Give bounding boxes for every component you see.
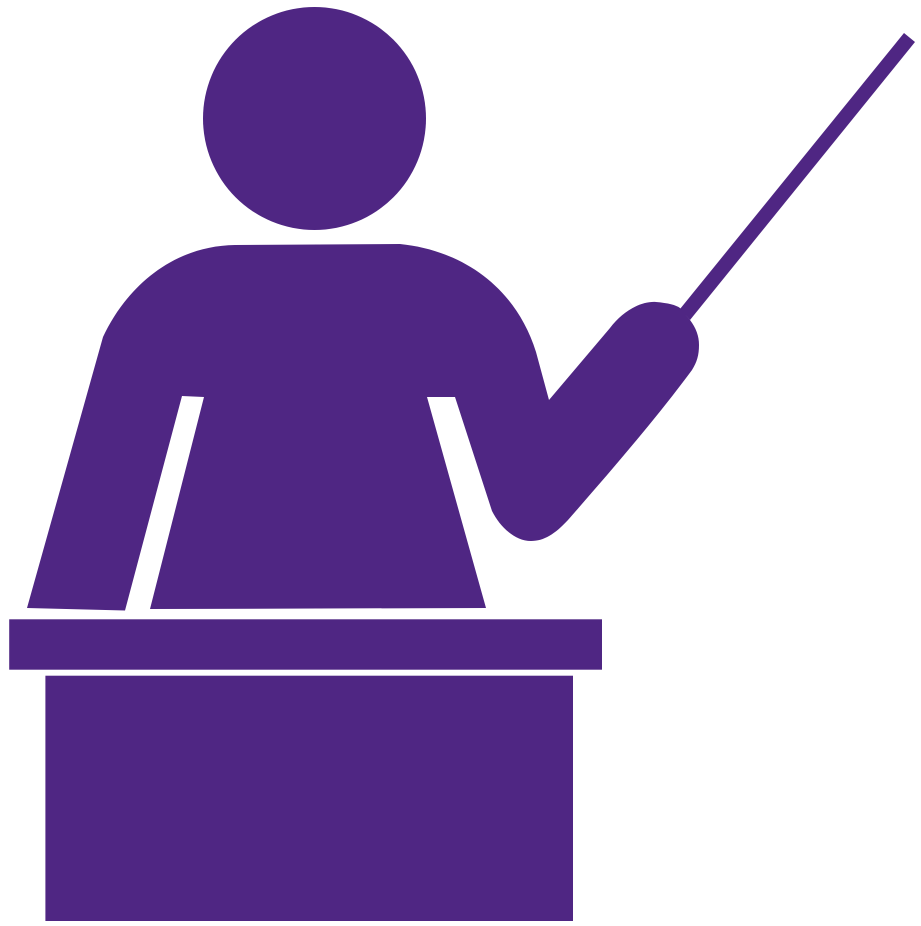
icon: head	[203, 7, 426, 230]
icon: torso and arms	[27, 244, 699, 610]
icon: pointer stick	[680, 33, 915, 320]
icon: lectern body	[45, 676, 573, 921]
icon: lectern top	[9, 619, 602, 670]
